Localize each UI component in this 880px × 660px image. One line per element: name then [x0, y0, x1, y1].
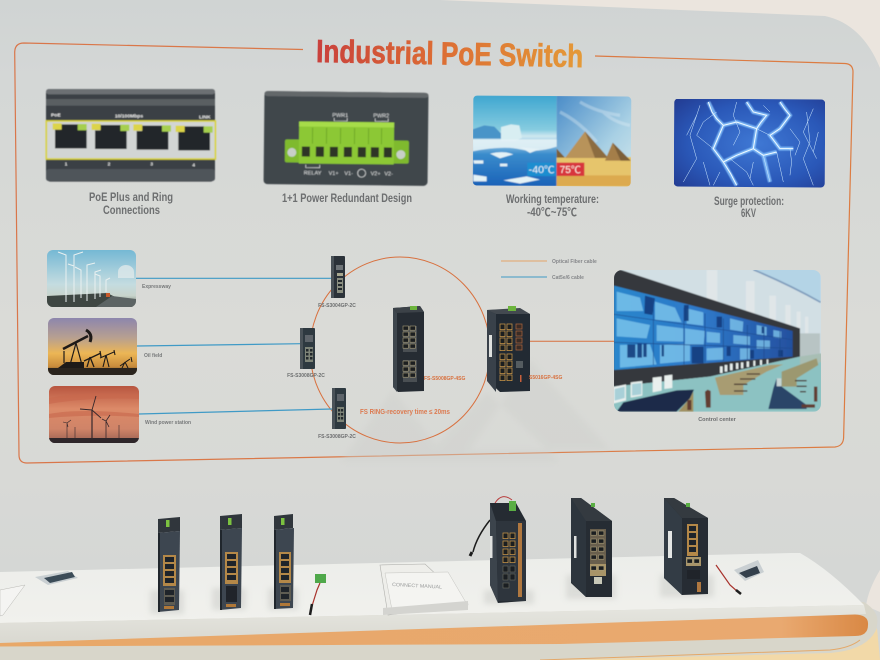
port panel image: PoE: [51, 112, 61, 118]
label: FS-S5016GP-4SG: S5016GP-4SG: [529, 375, 562, 381]
application label: oil field: Oil field: [144, 353, 162, 359]
label: ring recovery time: FS RING-recovery time ≤ 20ms: [360, 409, 450, 416]
orange frame: [15, 43, 853, 463]
warm floor corner: [560, 628, 880, 660]
feature: surge: [674, 99, 825, 188]
port panel image: 3: [150, 162, 153, 168]
caption: temperature: -40℃~75℃: [527, 207, 577, 219]
product: switch 4 with cable: [470, 497, 526, 603]
port panel image: 4: [192, 163, 195, 169]
application label: expressway: Expressway: [142, 284, 171, 290]
product: switch 2: [220, 514, 242, 610]
port panel image: 1: [65, 162, 68, 168]
shelf item: manuals: CONNECT MANUAL: [392, 582, 442, 591]
port panel image: 2: [108, 162, 111, 168]
shelf front lip: [0, 605, 866, 644]
shelf item: power connector cable: [310, 574, 326, 615]
shelf item: manuals: [380, 564, 468, 615]
product: switch 6: [664, 498, 708, 595]
temperature image: [473, 95, 633, 187]
shelf item: right bag: [734, 560, 764, 581]
fiber ring: [310, 257, 490, 443]
link: wind power cable: [139, 409, 332, 414]
terminal panel image: V2+: [371, 171, 381, 177]
caption: surge: [714, 196, 784, 220]
caption: surge: 6KV: [741, 208, 756, 220]
switch: FS-S5016GP-4SG: [487, 306, 530, 392]
port panel image: [46, 89, 215, 182]
application label: wind power: Wind power station: [145, 420, 191, 426]
product: switch 5: [571, 498, 612, 597]
port panel image: LINK: [199, 115, 211, 121]
application image: wind power: [49, 386, 139, 443]
caption: temperature: [506, 194, 599, 219]
shelf shadows: [150, 575, 714, 614]
product: switch 3: [274, 514, 294, 609]
lower shelf edge: [540, 640, 860, 660]
title: Industrial PoE Switch: [316, 33, 584, 74]
control center image: [613, 268, 823, 412]
shelf front face: [0, 602, 877, 660]
feature: power connector: [264, 91, 428, 186]
caption: PoE: [89, 192, 173, 217]
orange slot: [0, 614, 868, 646]
caption: temperature: Working temperature:: [506, 194, 599, 206]
terminal panel image: RELAY: [304, 171, 322, 177]
label: FS-S3008GP-2C lower: FS-S3008GP-2C: [318, 434, 356, 440]
shelf item: left bag: [35, 571, 78, 585]
caption: PoE: Connections: [103, 205, 160, 217]
caption: PoE: PoE Plus and Ring: [89, 192, 173, 204]
temperature image: -40℃: [529, 165, 555, 176]
link: oil field cable: [137, 344, 301, 346]
legend: [501, 259, 597, 281]
product: switch 1: [158, 517, 180, 612]
link: expressway cable: [136, 277, 331, 279]
feature: temperature: [473, 95, 633, 187]
terminal panel image: V1+: [329, 171, 339, 177]
legend: cat5e cable: Cat5e/6 cable: [552, 275, 584, 281]
terminal panel image: PWR2: [373, 113, 389, 119]
terminal panel image: V1-: [344, 171, 353, 177]
shelf item: right cable: [716, 565, 741, 594]
shelf item: left brochure: [0, 585, 25, 616]
port panel image: 10/100Mbps: [115, 114, 143, 120]
switch: FS-S5008GP-4SG: [393, 306, 424, 392]
label: FS-S3008GP-2C upper: FS-S3008GP-2C: [287, 373, 325, 379]
feature: PoE ports: [46, 89, 215, 182]
application image: oil field: [48, 318, 137, 375]
switch: FS-S3008GP-2C lower: [332, 388, 346, 429]
caption: power: 1+1 Power Redundant Design: [282, 193, 412, 205]
label: FS-S3004GP-2C: FS-S3004GP-2C: [318, 303, 356, 309]
link: fiber to control center: [530, 340, 614, 342]
shelf: [0, 553, 877, 660]
terminal panel image: PWR1: [332, 113, 348, 119]
temperature image: 75℃: [560, 165, 581, 176]
terminal panel image: V2-: [384, 171, 393, 177]
label: control center: Control center: [698, 417, 737, 423]
shelf top surface: [0, 553, 864, 623]
application image: expressway: [47, 250, 136, 307]
legend: optical fiber: Optical Fiber cable: [552, 259, 597, 265]
light cones on wall: [340, 360, 610, 462]
lightning image: [674, 99, 825, 188]
switch: FS-S3008GP-2C upper: [300, 328, 315, 369]
caption: surge: Surge protection:: [714, 196, 784, 208]
label: FS-S5008GP-4SG: FS-S5008GP-4SG: [424, 376, 466, 382]
switch: FS-S3004GP-2C: [331, 256, 345, 298]
terminal panel image: [264, 91, 428, 186]
